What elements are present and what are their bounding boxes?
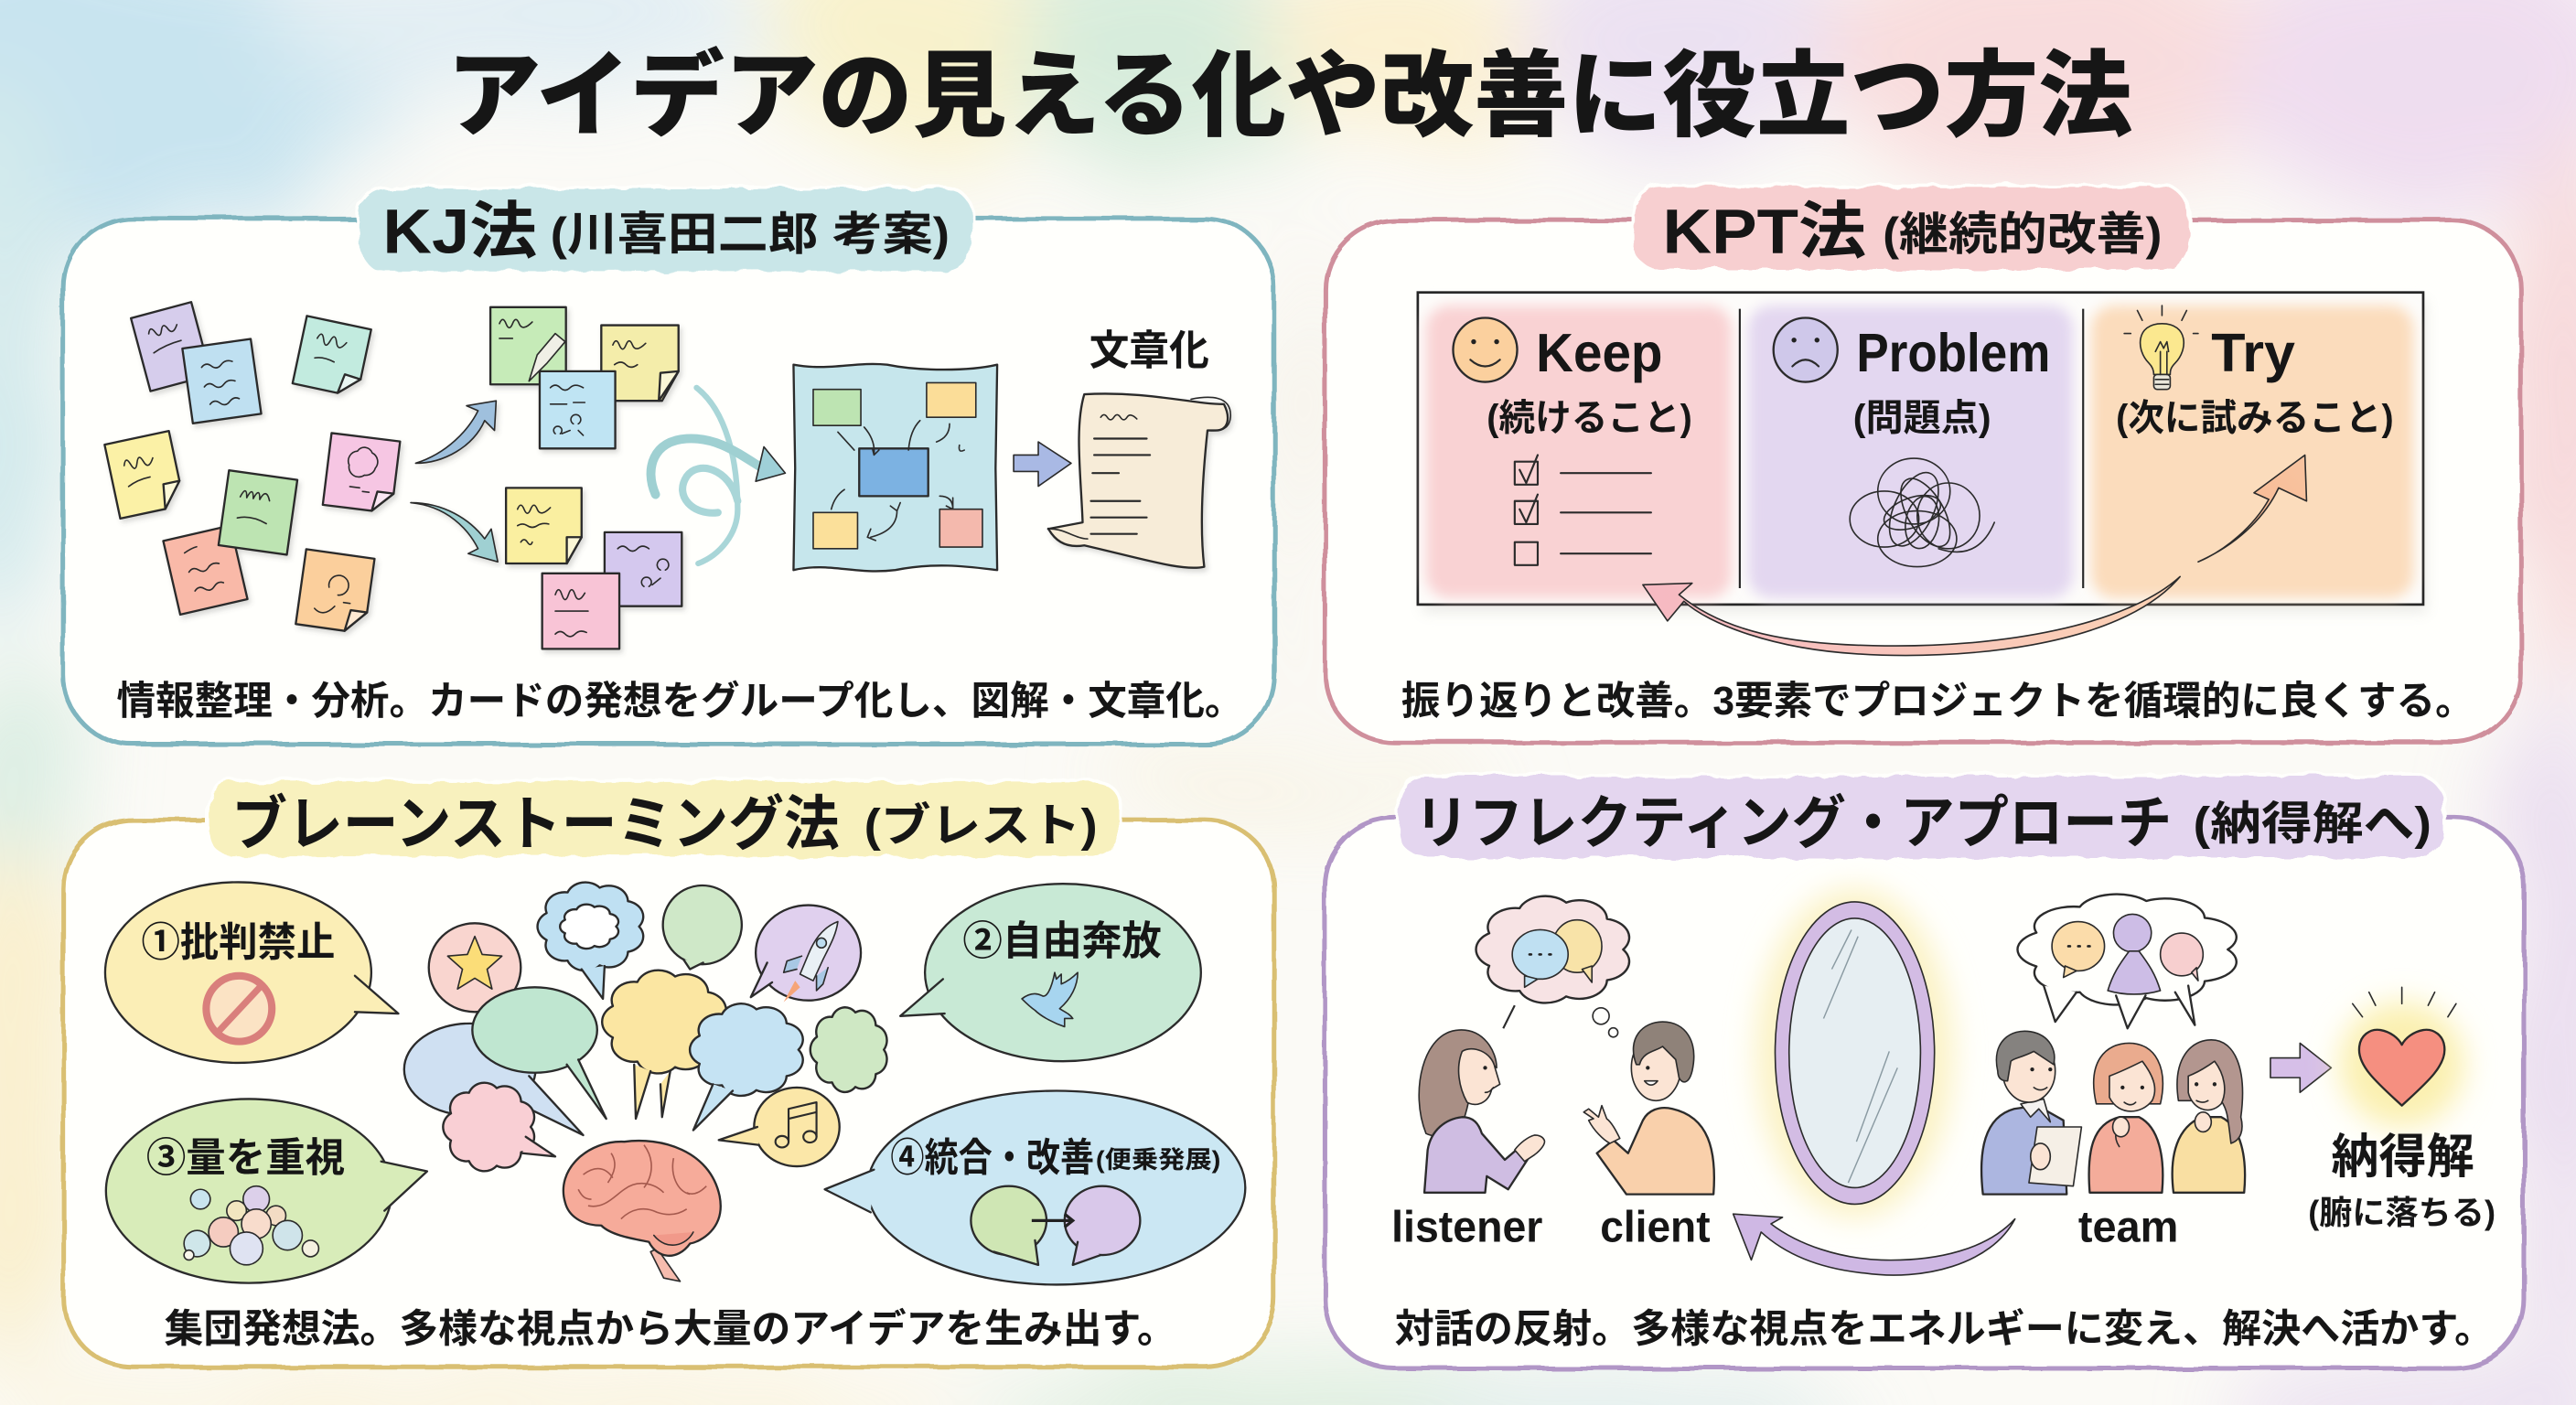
- label: 腑に落ちる: (腑に落ちる): [2308, 1194, 2496, 1231]
- label: 納得解: 納得解: [2331, 1131, 2474, 1184]
- scattered sticky notes: [104, 302, 400, 634]
- label: team: team: [2078, 1203, 2178, 1252]
- panel frame: [1325, 818, 2524, 1368]
- bubble: music note: [719, 1088, 840, 1166]
- icon: rocket: [784, 922, 838, 1003]
- bubble: ④統合・改善: (便乗発展): [1096, 1146, 1220, 1174]
- icon: glowing heart: [2339, 987, 2464, 1127]
- bubble: big green: [472, 987, 606, 1119]
- heading: リフレクティング・アプローチ: リフレクティング・アプローチ: [1414, 791, 2172, 855]
- group of notes: top: [490, 307, 679, 448]
- icon: scroll document: [1048, 393, 1230, 568]
- column: Problem: [1748, 306, 2073, 598]
- caption: 対話の反射。多様な視点をエネルギーに変え、解決へ活かす。: [1395, 1307, 2494, 1351]
- column: Problem: Problem: [1856, 322, 2050, 383]
- arrow: back to Keep: [1643, 576, 2180, 656]
- panel frame: [1325, 220, 2521, 743]
- arrow: notes to bottom group: [411, 503, 498, 562]
- bubble: yellow cloud: [602, 971, 726, 1119]
- panel frame: [63, 219, 1274, 745]
- icon: prohibition sign: [206, 976, 272, 1042]
- arrow: Try up: [2198, 455, 2306, 562]
- heading: KJ法: [359, 188, 972, 273]
- caption: 情報整理・分析。カードの発想をグループ化し、図解・文章化。: [117, 680, 1244, 724]
- panel frame: [63, 820, 1274, 1367]
- KPT table: [1418, 293, 2427, 613]
- labels: listener and client: client: [1600, 1203, 1711, 1252]
- arrow: swirl to map: [651, 388, 785, 563]
- person: listener: [1419, 1030, 1545, 1193]
- heading: KPT法: [1631, 186, 2190, 271]
- heading: KJ法: (川喜田二郎 考案): [551, 208, 950, 260]
- icon: dove: [1022, 972, 1078, 1026]
- arrow: team reflects to client: [1733, 1214, 2015, 1275]
- thought bubble: listener and client: [1476, 896, 1629, 1037]
- bubble: green cloud: [810, 1007, 887, 1092]
- heading: KPT法: (継続的改善): [1883, 208, 2162, 260]
- heading: ブレーンストーミング法: (ブレスト): [864, 799, 1098, 852]
- labels: listener and client: listener: [1391, 1203, 1542, 1252]
- bubble: star: [429, 923, 521, 1012]
- icon: sad face: [1774, 318, 1838, 382]
- bubble: green: [663, 885, 742, 970]
- icon: tangled scribble: [1850, 458, 1994, 567]
- bubble: cloud blue: [538, 883, 643, 999]
- person: man with paper: [1981, 1031, 2081, 1195]
- arrow: notes to top group: [415, 401, 496, 463]
- label: 文章化: 文章化: [1089, 327, 1209, 374]
- bubble: ③量を重視: ③量を重視: [146, 1135, 345, 1180]
- bubble: rocket: [751, 906, 861, 1003]
- labels: listener and client: [1391, 1203, 1711, 1252]
- person: client: [1583, 1022, 1714, 1195]
- panel: KPT法: [1325, 186, 2521, 743]
- speech bubble: team: [2017, 895, 2237, 1028]
- icon: many small bubbles: [184, 1186, 318, 1265]
- diagram map: [793, 364, 997, 571]
- heading: リフレクティング・アプローチ: [1398, 776, 2444, 859]
- column: Keep: (続けること): [1487, 397, 1692, 439]
- mirror: [1756, 889, 1953, 1217]
- column: Try: Try: [2211, 322, 2295, 383]
- heading: KPT法: KPT法: [1662, 198, 1866, 267]
- icon: merging speech bubbles: [971, 1186, 1140, 1265]
- icon: music notes: [776, 1102, 817, 1147]
- bubble: pink cloud: [443, 1083, 555, 1171]
- checklist: [1515, 455, 1651, 565]
- column: Keep: Keep: [1536, 322, 1662, 383]
- arrow to heart: [2270, 1043, 2331, 1092]
- group of notes: bottom: [506, 488, 682, 649]
- caption: 振り返りと改善。3要素でプロジェクトを循環的に良くする。: [1401, 680, 2474, 724]
- column: Keep: [1426, 306, 1732, 598]
- panel: KJ法: [63, 188, 1274, 745]
- icon: smiley: [1453, 318, 1518, 382]
- bubble: ④統合・改善: ④統合・改善: [890, 1136, 1094, 1180]
- bubble: ②自由奔放: [900, 884, 1201, 1061]
- title: アイデアの見える化や改善に役立つ方法: [446, 43, 2132, 148]
- icon: brain: [564, 1141, 721, 1282]
- bubble: ③量を重視: [106, 1099, 427, 1283]
- column: Try: (次に試みること): [2116, 397, 2394, 439]
- people: team: [1981, 1031, 2245, 1195]
- column: Problem: (問題点): [1853, 397, 1991, 439]
- bubble: blue cloud: [690, 1003, 803, 1131]
- bubble: ①批判禁止: ①批判禁止: [141, 920, 335, 965]
- bubble: ②自由奔放: ②自由奔放: [962, 918, 1162, 963]
- arrow to text: [1014, 442, 1071, 487]
- column: Try: [2091, 306, 2413, 598]
- heading: KJ法: KJ法: [382, 198, 537, 267]
- heading: ブレーンストーミング法: [207, 780, 1121, 857]
- panel: ブレーンストーミング法: [63, 780, 1274, 1367]
- panel: リフレクティング・アプローチ: [1325, 776, 2524, 1368]
- bubble: light blue: [404, 1024, 584, 1135]
- person: woman with pink top: [2089, 1043, 2163, 1193]
- person: woman with yellow top: [2173, 1040, 2245, 1193]
- bubble: ①批判禁止: [105, 882, 399, 1063]
- icon: light bulb: [2124, 306, 2198, 390]
- heading: ブレーンストーミング法: ブレーンストーミング法: [231, 790, 840, 857]
- caption: 集団発想法。多様な視点から大量のアイデアを生み出す。: [165, 1306, 1176, 1351]
- heading: リフレクティング・アプローチ: (納得解へ): [2194, 798, 2431, 850]
- bubble: ④統合・改善: [825, 1090, 1245, 1284]
- brainstorm cluster of idea bubbles: [404, 883, 887, 1282]
- icon: pencil: [529, 334, 565, 381]
